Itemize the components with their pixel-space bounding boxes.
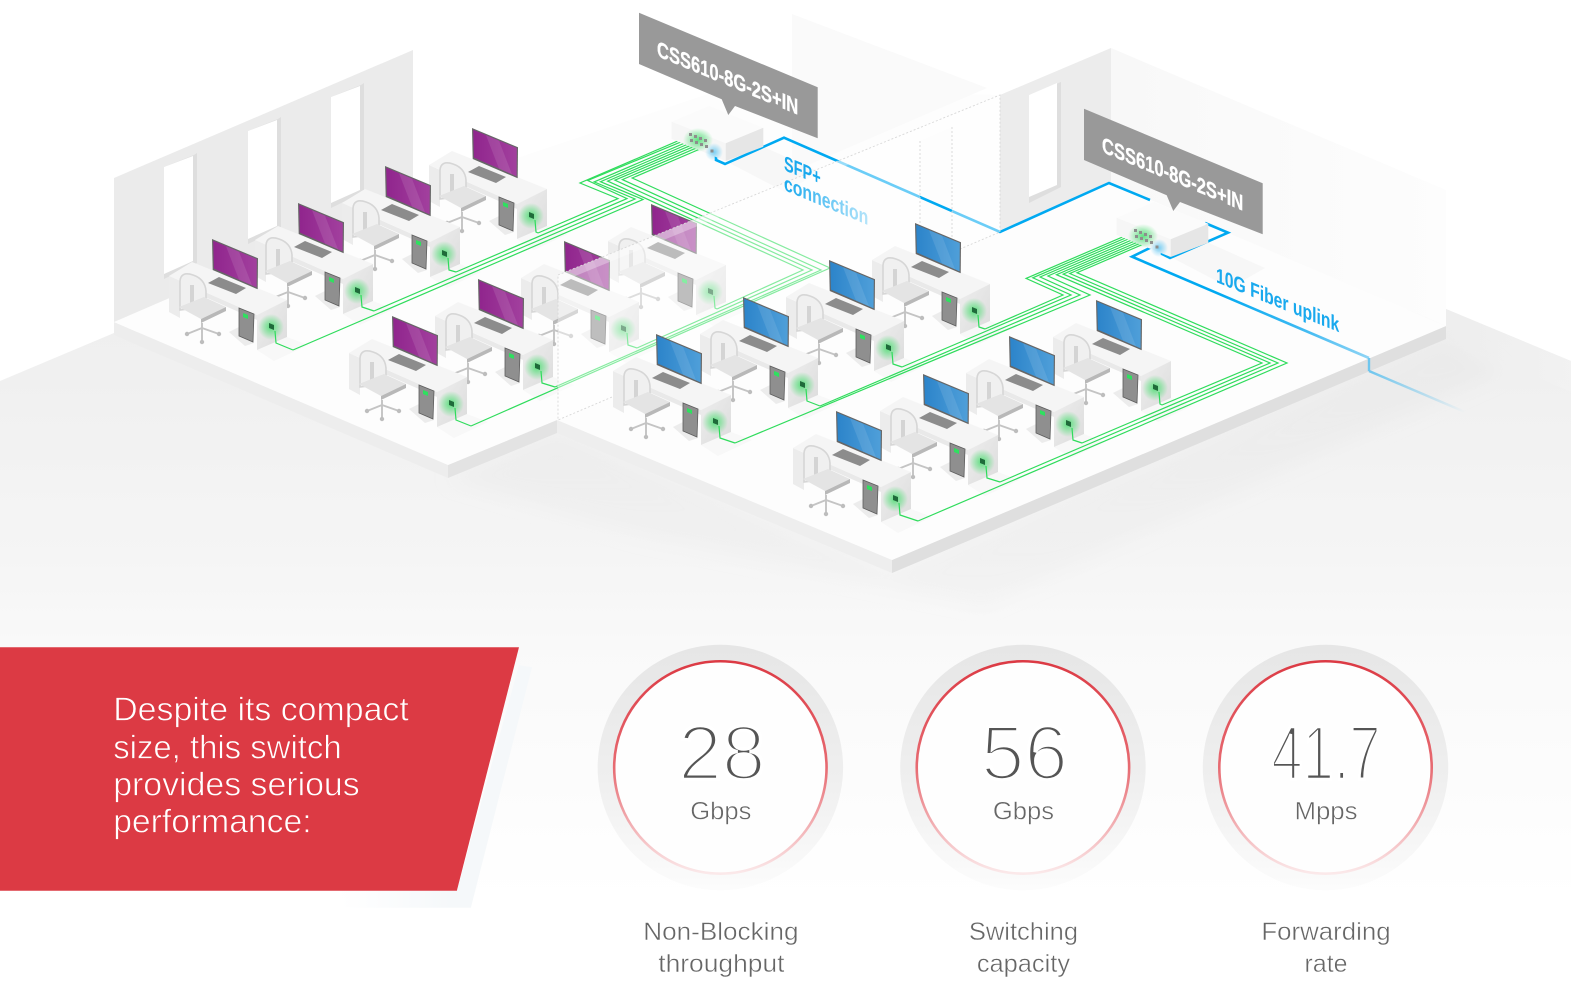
green cable bundle: right switch to blue workstations [735, 231, 1287, 521]
10G fiber uplink line [1132, 244, 1465, 412]
panel text: provides serious [113, 767, 360, 804]
callout: right switch label: CSS610-8G-2S+IN [1102, 134, 1243, 216]
purple workstations, back row [429, 128, 547, 239]
stat: 41.7 Mpps forwarding rate [1203, 645, 1448, 978]
purple workstations, front row 4 [608, 204, 726, 315]
label: SFP+ connection: SFP+ [784, 152, 821, 191]
green cable bundle: left switch to purple workstations [293, 136, 830, 426]
stat: 56 Gbps switching capacity [900, 645, 1146, 978]
lower section: performance panel and stats [0, 645, 1448, 978]
stat: 41.7 Mpps forwarding rate: Mpps [1294, 798, 1358, 826]
label: SFP+ connection: connection [784, 172, 868, 231]
blue workstation back 3 [786, 260, 904, 371]
SFP+ blue connection line [716, 138, 1150, 232]
stat: 41.7 Mpps forwarding rate: rate [1304, 950, 1348, 978]
blue workstation back 2 [700, 297, 820, 408]
floor shadows of desks and switches [257, 147, 1265, 533]
blue workstation front 4 [1053, 300, 1171, 411]
blue workstation front 2 [880, 374, 1000, 485]
slab shadow [448, 339, 1500, 605]
ground plane [0, 309, 1571, 981]
panel text: Despite its compact [113, 691, 409, 728]
stat: 28 Gbps non-blocking throughput [598, 645, 843, 978]
purple workstation 2 [255, 203, 374, 314]
label: 10G Fiber uplink: 10G Fiber uplink [1216, 264, 1339, 338]
left network switch [672, 106, 763, 161]
panel text: size, this switch [113, 729, 342, 766]
purple workstation front 2 [435, 279, 555, 390]
stat: 28 Gbps non-blocking throughput: throughput [658, 950, 785, 978]
blue workstation front 3 [966, 336, 1084, 447]
callout: left switch label: CSS610-8G-2S+IN [657, 38, 798, 120]
stat: 56 Gbps switching capacity: capacity [977, 950, 1071, 978]
stat: 28 Gbps non-blocking throughput: 28 [678, 710, 765, 796]
stat: 56 Gbps switching capacity: Gbps [993, 798, 1054, 826]
right switch loop cable [1162, 223, 1228, 258]
stat: 41.7 Mpps forwarding rate: Forwarding [1261, 918, 1391, 946]
stat: 41.7 Mpps forwarding rate: 41.7 [1271, 710, 1381, 796]
stat: 56 Gbps switching capacity: 56 [981, 710, 1068, 796]
raised floor slab [114, 90, 1446, 573]
purple workstation front 1 [349, 316, 471, 427]
callout: right switch label [1084, 109, 1263, 234]
stat: 56 Gbps switching capacity: Switching [969, 918, 1078, 946]
panel text [113, 691, 409, 841]
translucent glass partition with door [558, 95, 1000, 420]
purple workstation 3 [342, 166, 460, 277]
left room wall with windows [114, 50, 413, 322]
pale partition behind switch [792, 14, 987, 172]
stat: 28 Gbps non-blocking throughput: Gbps [690, 798, 751, 826]
blue workstation back 1 [613, 334, 735, 445]
red panel [0, 647, 532, 908]
back wall fragment [1446, 309, 1571, 392]
purple workstation 1 [169, 239, 293, 350]
stat: 28 Gbps non-blocking throughput: Non-Blocking [643, 918, 799, 946]
purple workstation front 3 [521, 241, 639, 352]
blue workstation front 1 [793, 411, 918, 522]
panel text: performance: [113, 804, 312, 841]
right network switch [1117, 202, 1208, 257]
callout: left switch label [639, 13, 818, 138]
blue workstation back 4 [872, 223, 990, 334]
right room wall with window [1000, 48, 1446, 326]
